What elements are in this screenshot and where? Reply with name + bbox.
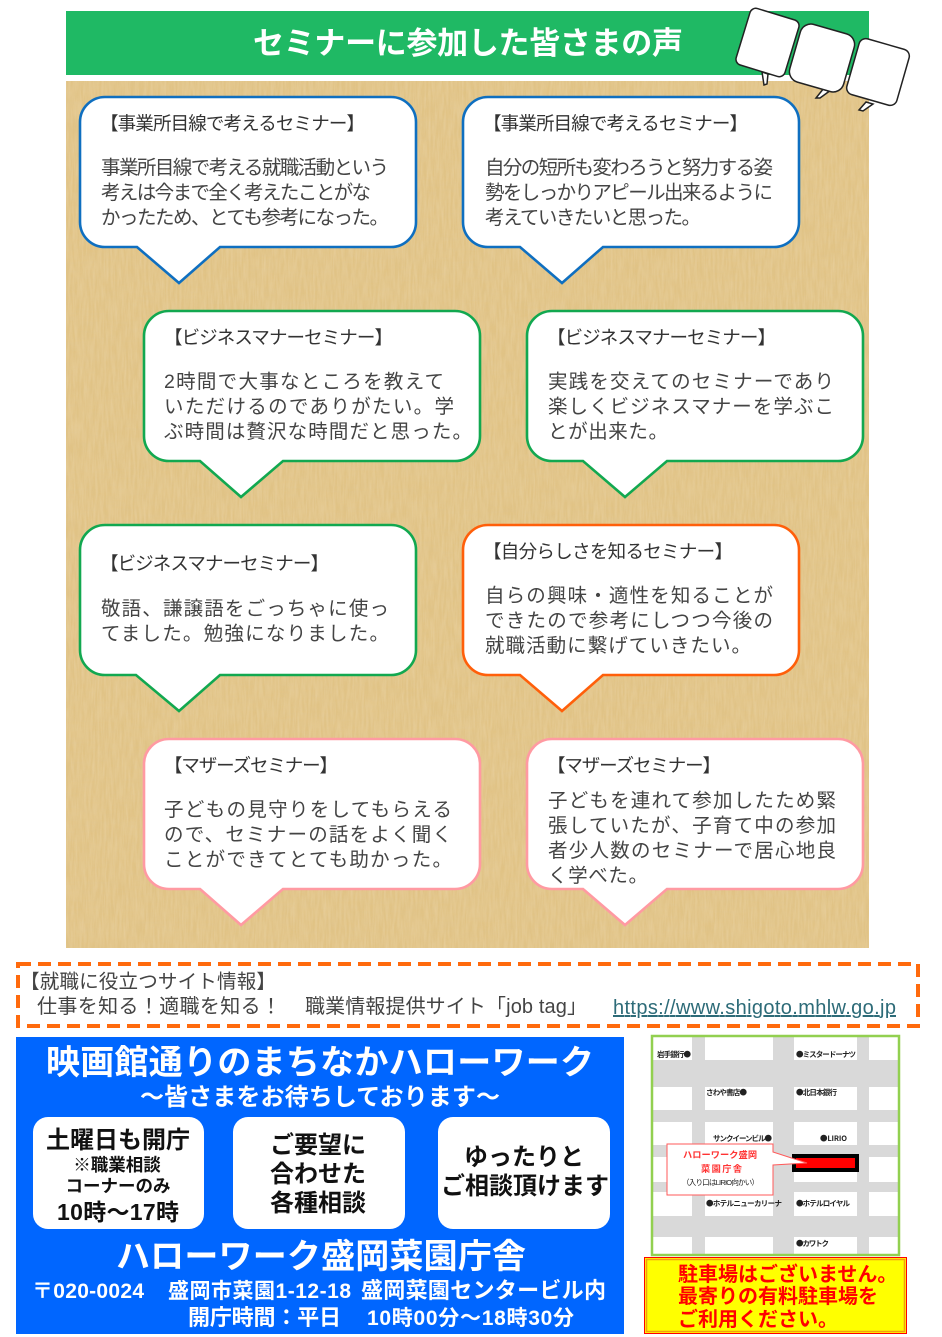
speech bubble 3: ビジネスマナー: 2時間で大事なところを教えて	[164, 371, 444, 393]
blue information panel: 10時00分～18時30分	[367, 1307, 574, 1330]
feature box: ご要望に合わせた各種相談: 各種相談	[270, 1189, 366, 1217]
speech bubble 1: 事業所目線: 考えは今まで全く考えたことがな	[101, 182, 371, 204]
wood background panel	[66, 81, 869, 948]
speech bubble 8: マザーズ: 者少人数のセミナーで居心地良	[548, 840, 836, 862]
address: 〒020-0024	[32, 1280, 144, 1303]
office name: ハローワーク盛岡菜園庁舎	[116, 1238, 526, 1276]
map labels: ●ホテルニューカリーナ	[706, 1198, 782, 1209]
title: セミナーに参加した皆さまの声	[253, 26, 683, 61]
sub heading: ～皆さまをお待ちしております～	[140, 1084, 500, 1111]
callout: office location: （入り口はLIRIO向かい）	[682, 1177, 759, 1187]
speech bubble 6: 自分らしさ: 自らの興味・適性を知ることが	[485, 585, 773, 607]
blue information panel: 盛岡市菜園1-12-18	[168, 1280, 351, 1303]
speech bubble 1: 事業所目線: 事業所目線で考える就職活動という	[101, 157, 389, 179]
access map	[652, 1036, 899, 1255]
parking notice: 最寄りの有料駐車場を	[678, 1285, 878, 1308]
speech bubble 4: ビジネスマナー: 実践を交えてのセミナーであり	[548, 371, 834, 393]
map labels: ●LIRIO	[820, 1133, 847, 1144]
map labels: ●北日本銀行	[796, 1087, 838, 1098]
building marker	[794, 1156, 857, 1170]
feature box: 土曜日も開庁: ※職業相談	[73, 1155, 161, 1175]
title banner	[66, 11, 869, 75]
feature box: ゆったりとご相談頂けます	[438, 1117, 610, 1229]
parking notice	[644, 1258, 906, 1334]
speech bubble 2: 事業所目線: 考えていきたいと思った。	[485, 207, 701, 229]
speech bubble 8: マザーズ: 【マザーズセミナー】	[547, 755, 721, 776]
speech bubble 7: マザーズ: 子どもの見守りをしてもらえる	[164, 799, 452, 821]
speech bubble 8: マザーズ: く学べた。	[548, 865, 648, 887]
opening hours: 開庁時間：平日	[188, 1305, 341, 1330]
callout: office location	[667, 1144, 807, 1195]
feature box: ご要望に合わせた各種相談: ご要望に	[270, 1131, 366, 1159]
speech bubble 4: ビジネスマナー: 【ビジネスマナーセミナー】	[547, 327, 776, 348]
speech bubble 6: 自分らしさ: 就職活動に繋げていきたい。	[485, 635, 751, 657]
speech bubble 3: ビジネスマナー: ぶ時間は贅沢な時間だと思った。	[164, 421, 472, 443]
speech bubble 8: マザーズ	[527, 739, 863, 925]
speech bubble 7: マザーズ: 【マザーズセミナー】	[164, 755, 338, 776]
map labels	[657, 1049, 856, 1249]
speech bubble 6: 自分らしさ: 【自分らしさを知るセミナー】	[483, 541, 733, 562]
blue information panel: 盛岡菜園センタービル内	[361, 1278, 606, 1303]
speech bubble 3: ビジネスマナー: いただけるのでありがたい。学	[164, 396, 454, 418]
speech bubble 5: ビジネスマナー: 【ビジネスマナーセミナー】	[100, 553, 329, 574]
feature box: ゆったりとご相談頂けます: ゆったりと	[464, 1144, 584, 1171]
map labels: 岩手銀行●	[657, 1049, 692, 1060]
callout: office location: 菜園庁舎	[701, 1163, 743, 1174]
feature box: 土曜日も開庁	[33, 1117, 204, 1229]
speech bubble 2: 事業所目線: 【事業所目線で考えるセミナー】	[483, 113, 748, 134]
speech bubble 7: マザーズ	[144, 739, 480, 925]
speech bubble 6: 自分らしさ: できたので参考にしつつ今後の	[485, 610, 773, 632]
speech bubble 5: ビジネスマナー: 敬語、謙譲語をごっちゃに使っ	[101, 598, 389, 620]
speech bubble 3: ビジネスマナー: 【ビジネスマナーセミナー】	[164, 327, 393, 348]
parking notice: 駐車場はございません。	[678, 1262, 897, 1286]
speech bubble 5: ビジネスマナー: てました。勉強になりました。	[101, 623, 389, 645]
speech bubble 4: ビジネスマナー: 楽しくビジネスマナーを学ぶこ	[548, 396, 834, 418]
speech bubble 2: 事業所目線: 自分の短所も変わろうと努力する姿	[485, 157, 773, 179]
feature box: 土曜日も開庁: 土曜日も開庁	[46, 1127, 190, 1154]
job site information box	[18, 964, 918, 1026]
job site information box: 職業情報提供サイト「job tag」	[305, 995, 587, 1018]
feature box: 土曜日も開庁: 10時～17時	[57, 1199, 179, 1225]
speech bubble 4: ビジネスマナー: とが出来た。	[548, 421, 668, 443]
feature box: ゆったりとご相談頂けます: ご相談頂けます	[441, 1172, 609, 1200]
main heading: 映画館通りのまちなかハローワーク	[46, 1044, 594, 1082]
speech bubble 1: 事業所目線: 【事業所目線で考えるセミナー】	[100, 113, 365, 134]
roads	[652, 1036, 899, 1255]
speech bubble 1: 事業所目線: かったため、とても参考になった。	[101, 207, 389, 229]
job site information box: 【就職に役立つサイト情報】	[20, 971, 276, 993]
speech bubble 6: 自分らしさ	[463, 525, 799, 711]
map labels: さわや書店●	[706, 1087, 748, 1098]
speech bubble 8: マザーズ: 張していたが、子育て中の参加	[548, 815, 836, 837]
job site information box: https://www.shigoto.mhlw.go.jp	[613, 997, 896, 1019]
speech bubble 4: ビジネスマナー	[527, 311, 863, 497]
speech bubble 2: 事業所目線: 勢をしっかりアピール出来るように	[485, 182, 773, 204]
speech bubble 5: ビジネスマナー	[80, 525, 416, 711]
callout: office location: ハローワーク盛岡	[683, 1149, 757, 1160]
map labels: ●ホテルロイヤル	[796, 1198, 850, 1209]
map labels: サンクイーンビル●	[713, 1133, 772, 1144]
feature box: ご要望に合わせた各種相談: 合わせた	[270, 1161, 366, 1188]
job site information box: 仕事を知る！適職を知る！	[37, 995, 281, 1018]
map labels: ●カワトク	[796, 1238, 829, 1249]
feature box: ご要望に合わせた各種相談	[233, 1117, 405, 1229]
speech bubble 8: マザーズ: 子どもを連れて参加したため緊	[548, 790, 836, 812]
speech bubble 3: ビジネスマナー	[144, 311, 480, 497]
feature box: 土曜日も開庁: コーナーのみ	[66, 1176, 170, 1196]
icon: three blank speech balloons	[734, 7, 911, 111]
parking notice: ご利用ください。	[678, 1307, 838, 1331]
map labels: ●ミスタードーナツ	[796, 1049, 856, 1060]
blue information panel	[16, 1037, 624, 1334]
speech bubble 7: マザーズ: ことができてとても助かった。	[164, 849, 452, 871]
speech bubble 1: 事業所目線	[80, 97, 416, 283]
speech bubble 2: 事業所目線	[463, 97, 799, 283]
speech bubble 7: マザーズ: ので、セミナーの話をよく聞く	[164, 824, 452, 846]
